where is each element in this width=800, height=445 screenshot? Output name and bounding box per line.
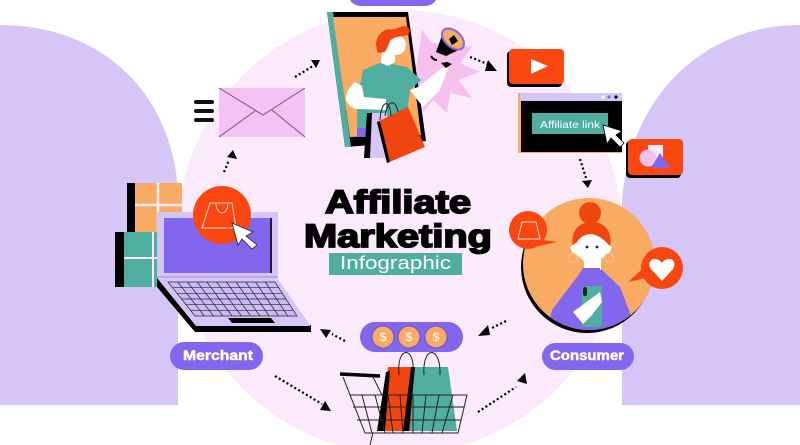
consumer portrait [521,198,655,335]
subtitle badge: Infographic [340,253,451,273]
icon: phone with marketer [327,12,480,163]
megaphone [436,30,463,56]
arrow: coins to merchant [320,329,345,341]
central pink circle [178,10,622,445]
consumer label [542,343,634,370]
shirt [357,62,421,130]
left lavender arch [0,25,178,405]
arrow: merchant to email [224,150,237,172]
arm right [410,68,448,107]
coins pill: $ [406,330,413,344]
arrow: cart to consumer [478,373,527,412]
arrow: marketer to video [470,57,497,71]
icon: cursor on laptop [232,223,257,249]
neck and head [381,50,395,66]
browser window with affiliate link: Affiliate link [540,119,601,131]
merchant label: Merchant [183,347,253,363]
arrow: merchant to cart [275,376,331,411]
icon: cursor on link [603,125,624,147]
top purple pill [348,0,438,6]
coins pill [360,322,463,352]
coins pill: $ [380,330,387,344]
arm left [346,82,386,110]
speech bubble: bag [509,211,557,249]
shopping cart with bags [340,352,467,445]
icon: bag bubble on laptop [193,186,251,244]
arrow: email to marketer [295,60,320,77]
right lavender arch [622,25,800,405]
icon: video player [507,49,564,87]
orange bag [377,107,425,163]
laptop [157,212,311,332]
starburst [416,30,480,113]
subtitle badge [329,253,462,275]
icon: menu lines [194,100,214,122]
merchant label [170,342,263,370]
title: Affiliate [325,184,471,220]
speech bubble: heart [628,247,683,289]
arrow: consumer to coins [478,321,506,336]
icon: envelope [219,88,305,137]
browser window with affiliate link [518,93,622,153]
icon: shapes card [626,139,683,178]
title: Marketing [304,218,492,254]
coins pill: $ [433,330,440,344]
lavender bag [364,113,391,158]
boxes [115,183,182,287]
arrow: link to consumer [580,159,592,188]
consumer label: Consumer [550,347,625,363]
title [304,184,492,254]
